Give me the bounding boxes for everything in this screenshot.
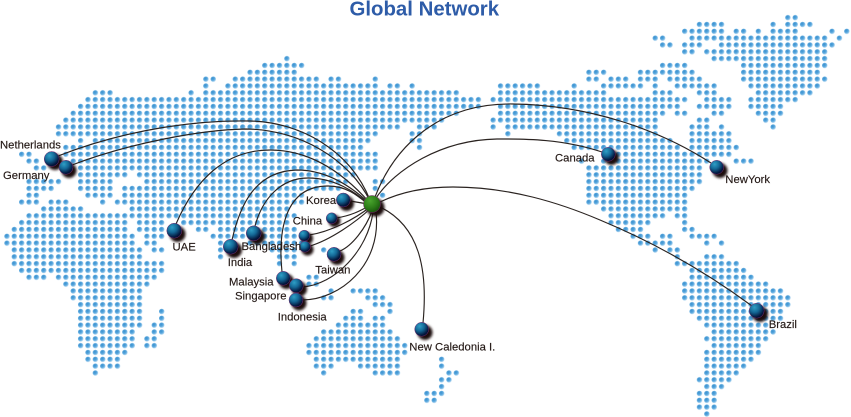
label: Singapore: Singapore (235, 291, 287, 303)
arc: Korea (350, 201, 368, 204)
label: Germany: Germany (3, 170, 50, 182)
arc: New Caledonia (378, 206, 424, 323)
arc: unnamed China node lower (310, 208, 371, 246)
label: Malaysia: Malaysia (229, 277, 274, 289)
arc: Netherlands (58, 121, 370, 200)
arc: Bangladesh (255, 178, 369, 226)
marker: China (326, 213, 340, 227)
marker: Brazil (749, 303, 768, 322)
location labels (0, 140, 797, 354)
label: India: India (228, 257, 253, 269)
arc: Malaysia (281, 186, 369, 272)
label: Indonesia: Indonesia (278, 312, 327, 324)
arc: New York (375, 104, 711, 197)
label: New York: New York (725, 174, 770, 186)
arc: unnamed China node upper (309, 207, 370, 235)
marker: Malaysia (276, 271, 294, 289)
marker: Taiwan (327, 247, 344, 265)
marker: Korea (336, 193, 354, 211)
marker: Germany (59, 160, 76, 178)
marker: New York (710, 160, 728, 178)
label: UAE: UAE (172, 242, 196, 254)
arc: Singapore (302, 212, 373, 287)
arc: China (336, 206, 369, 218)
label: Netherlands: Netherlands (0, 140, 61, 152)
marker: India (223, 239, 242, 258)
marker: New Caledonia (415, 322, 432, 340)
label: Canada: Canada (555, 153, 595, 165)
arc: Brazil (380, 187, 752, 306)
arc: India (232, 170, 369, 240)
marker: UAE (167, 223, 186, 242)
arc: Taiwan (340, 211, 372, 251)
label: China: China (293, 215, 323, 227)
connection lines from hub (58, 104, 752, 323)
arc: Germany (72, 129, 370, 201)
location markers (44, 147, 768, 340)
label: Brazil: Brazil (769, 319, 797, 331)
arc: Indonesia (302, 212, 377, 300)
arc: UAE (176, 150, 369, 224)
label: Taiwan: Taiwan (315, 264, 350, 276)
marker: Bangladesh (246, 226, 265, 244)
marker: China node lower (300, 241, 314, 256)
marker: Indonesia (289, 293, 306, 310)
marker: Canada (601, 147, 619, 165)
marker: Singapore (289, 279, 307, 296)
label: Korea: Korea (306, 195, 337, 207)
arc: Canada (376, 139, 602, 198)
marker: China node upper (299, 230, 313, 244)
hub marker (364, 196, 384, 216)
label: Bangladesh: Bangladesh (242, 241, 301, 253)
marker: Netherlands (44, 152, 63, 170)
label: New Caledonia: New Caledonia I. (409, 342, 495, 354)
